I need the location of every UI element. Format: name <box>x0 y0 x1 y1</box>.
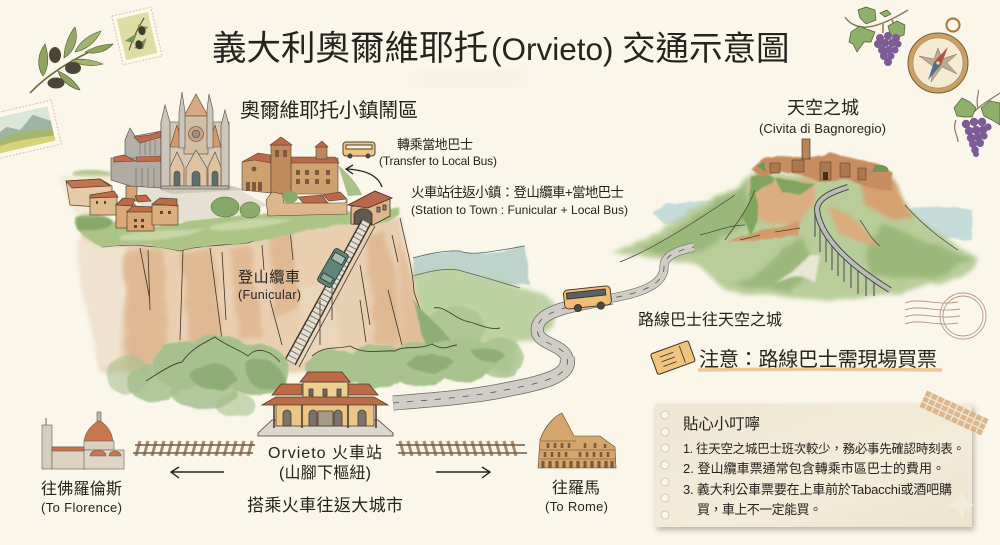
rail track right <box>396 441 527 456</box>
label: to Rome: 往羅馬 <box>552 479 600 497</box>
right bush lobes <box>305 306 524 388</box>
icon: ticket <box>650 340 695 375</box>
label: to Rome <box>545 479 608 514</box>
town palace <box>242 137 362 216</box>
note list: 買，車上不一定能買。 <box>697 502 822 517</box>
lower houses <box>266 192 347 216</box>
illustration: Orvieto railway station <box>258 372 393 436</box>
icon: grapes top <box>845 7 908 66</box>
callout: buy ticket on site <box>650 340 942 375</box>
road with bus <box>393 247 694 403</box>
note punch holes <box>661 411 669 519</box>
label: transfer to local bus <box>379 137 497 168</box>
town atop Civita <box>752 139 892 190</box>
hills behind the road <box>413 201 972 375</box>
icon: Colosseum <box>538 413 616 468</box>
label: take the train to big cities: 搭乘火車往返大城市 <box>247 496 403 515</box>
illustration: Orvieto cliff <box>60 170 433 376</box>
label: station to town: (Station to Town : Funicular + Local Bus) <box>411 203 628 217</box>
label: station to town: 火車站往返小鎮：登山纜車+當地巴士 <box>411 184 624 200</box>
arrow: to Florence <box>171 467 224 478</box>
icon: landscape stamp <box>0 100 61 161</box>
panel: tips note <box>655 404 978 527</box>
sparkle <box>946 490 978 521</box>
title: 交通示意圖 <box>622 31 790 68</box>
icon: Florence duomo <box>42 412 124 469</box>
label: Civita di Bagnoregio: (Civita di Bagnoregio) <box>759 121 886 136</box>
icon: route bus <box>563 286 612 313</box>
label: funicular: 登山纜車 <box>238 269 300 286</box>
label: to Florence <box>41 480 122 515</box>
icon: grapes right <box>954 90 1000 157</box>
label: Orvieto station <box>268 444 382 482</box>
icon: washi tape <box>919 390 989 436</box>
label: Civita di Bagnoregio: 天空之城 <box>787 98 859 118</box>
rail track left <box>133 441 255 456</box>
illustration: Civita di Bagnoregio hill <box>613 139 977 300</box>
icon: funicular tunnel station <box>348 191 392 225</box>
label: station to town <box>411 184 628 217</box>
note list <box>683 441 965 517</box>
viaduct and road to Civita <box>815 187 890 296</box>
icon: compass <box>908 18 968 93</box>
illustration: Orvieto plaza and town <box>66 92 362 231</box>
label: to Rome: (To Rome) <box>545 499 608 514</box>
title: (Orvieto) <box>491 31 614 67</box>
title: 義大利奧爾維耶托 <box>212 30 488 68</box>
Orvieto cathedral <box>111 92 229 189</box>
arrow: to Rome <box>436 467 490 478</box>
label: funicular <box>238 269 301 302</box>
arrow: transfer up to town <box>346 165 382 187</box>
left bush lobes <box>106 335 289 417</box>
label: Civita di Bagnoregio <box>759 98 886 136</box>
foothill bushes <box>106 300 524 417</box>
label: Orvieto station: (山腳下樞紐) <box>279 464 371 482</box>
label: Orvieto station: Orvieto 火車站 <box>268 444 382 462</box>
icon: olive branch <box>30 27 113 93</box>
funicular track <box>285 220 375 367</box>
village houses left <box>66 179 178 231</box>
icon: small local bus <box>343 142 375 158</box>
label: route bus to Civita: 路線巴士往天空之城 <box>638 311 782 329</box>
icon: olive stamp <box>112 7 162 65</box>
callout: buy ticket on site: 注意：路線巴士需現場買票 <box>699 348 937 371</box>
label: Orvieto town: 奧爾維耶托小鎮鬧區 <box>240 99 418 122</box>
label: to Florence: 往佛羅倫斯 <box>41 480 122 498</box>
note heading: 貼心小叮嚀 <box>683 415 760 433</box>
note list: 3. 義大利公車票要在上車前於Tabacchi或酒吧購 <box>683 482 952 497</box>
cliff-top greenery <box>75 208 400 251</box>
icon: funicular car <box>317 248 349 288</box>
icon: postmark <box>905 293 986 339</box>
label: funicular: (Funicular) <box>238 288 301 302</box>
note list: 1. 往天空之城巴士班次較少，務必事先確認時刻表。 <box>683 441 965 456</box>
note list: 2. 登山纜車票通常包含轉乘市區巴士的費用。 <box>683 461 945 476</box>
label: transfer to local bus: (Transfer to Local Bus) <box>379 154 497 168</box>
label: to Florence: (To Florence) <box>41 500 122 515</box>
label: transfer to local bus: 轉乘當地巴士 <box>397 137 473 152</box>
plaza trees <box>211 197 260 218</box>
